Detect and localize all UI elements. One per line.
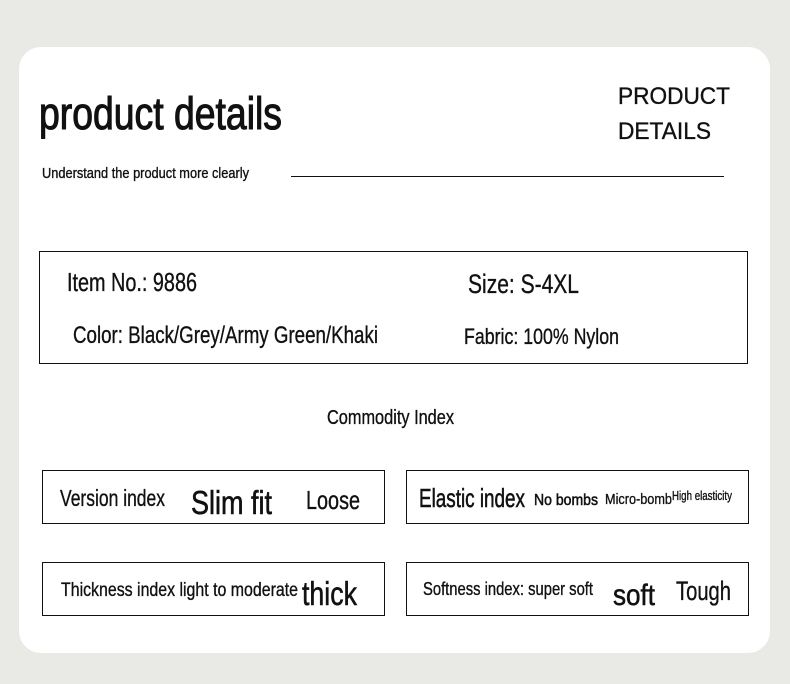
panel: softness index: Tough: [676, 576, 731, 606]
size: Size: S-4XL: [468, 269, 579, 299]
panel: thickness index: Thickness index light to moderate: [61, 580, 298, 601]
panel: elastic index: High elasticity: [672, 488, 732, 503]
panel: softness index: [406, 562, 748, 616]
panel: elastic index: [406, 470, 748, 524]
panel: elastic index: Micro-bomb: [605, 491, 672, 508]
subtitle: Understand the product more clearly: [42, 165, 249, 182]
heading: PRODUCT DETAILS: DETAILS: [618, 118, 711, 145]
heading: PRODUCT DETAILS: [618, 83, 730, 145]
section heading: commodity index: Commodity Index: [327, 407, 454, 429]
panel: version index: Loose: [306, 485, 360, 515]
panel: thickness index: [42, 562, 384, 616]
panel: version index: [42, 470, 384, 524]
heading: PRODUCT DETAILS: PRODUCT: [618, 83, 730, 110]
panel: version index: Version index: [60, 485, 165, 511]
panel: elastic index: No bombs: [534, 492, 598, 509]
panel: elastic index: Elastic index: [419, 483, 525, 513]
fabric: Fabric: 100% Nylon: [464, 324, 619, 349]
item number: Item No.: 9886: [67, 267, 197, 297]
panel: version index: Slim fit: [191, 484, 272, 521]
panel: softness index: Softness index: super soft: [423, 579, 593, 599]
title: product details: [39, 88, 282, 139]
panel: product specs: [40, 252, 748, 364]
panel: softness index: soft: [613, 579, 656, 612]
panel: thickness index: thick: [302, 575, 357, 612]
color: Color: Black/Grey/Army Green/Khaki: [73, 322, 378, 349]
